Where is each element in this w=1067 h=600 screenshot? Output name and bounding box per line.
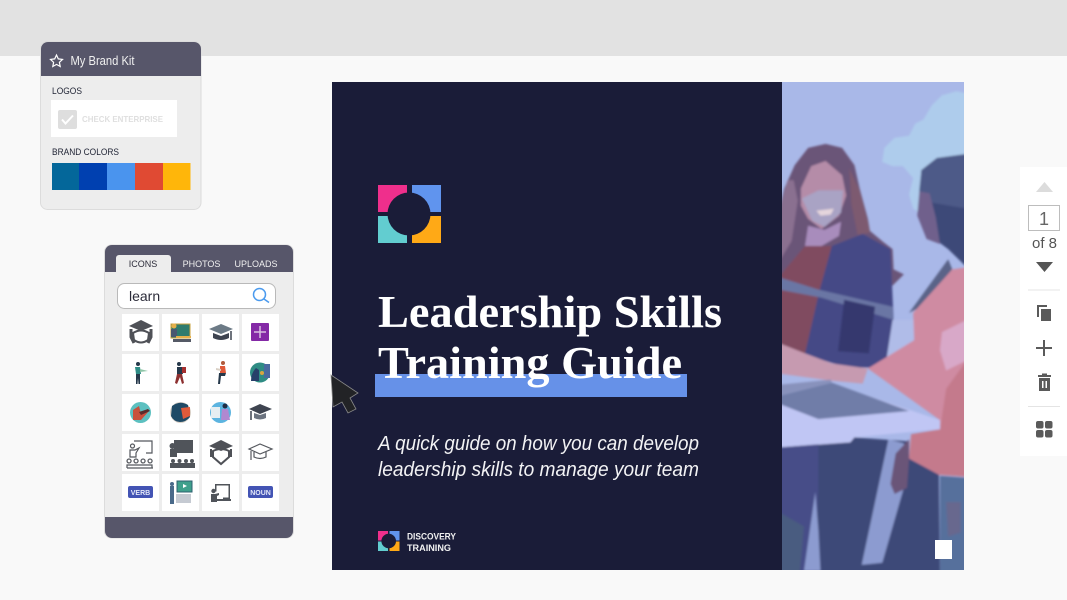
icon: grid view <box>1036 421 1052 438</box>
photo: left woman jacket <box>804 234 894 369</box>
search box <box>118 284 276 308</box>
brand kit header <box>41 42 201 76</box>
icon: graduate head large <box>209 440 233 464</box>
icon: previous page <box>1036 182 1053 192</box>
footer logo: DISCOVERY <box>407 532 457 542</box>
logo placeholder <box>51 100 177 137</box>
panel: slide photo <box>779 82 973 573</box>
page count: of 8 <box>1032 235 1057 252</box>
photo: jacket stripe <box>779 277 894 320</box>
panel: brand kit <box>40 42 201 210</box>
icon: purple plus <box>251 323 269 341</box>
panel tabs: ICONS <box>129 259 157 269</box>
footer logo: TRAINING <box>407 543 451 554</box>
icon: noun badge: NOUN <box>250 490 271 497</box>
panel footer <box>105 517 293 538</box>
icon: add <box>1036 340 1052 356</box>
icon: classroom solid <box>170 440 195 468</box>
icon: graduation cap <box>209 324 233 340</box>
photo: right woman collar <box>909 259 952 313</box>
icon: presenter with screen <box>170 481 192 504</box>
photo: left woman hair <box>782 142 904 286</box>
photo: window below jacket <box>886 318 912 358</box>
icon: cap outline <box>249 444 272 460</box>
icon: delete <box>1038 374 1051 391</box>
icon: round scene teal <box>250 362 270 382</box>
icon: graduate head <box>129 320 153 343</box>
icon: classroom outline <box>127 441 153 468</box>
subtitle: leadership skills to manage your team <box>378 459 699 481</box>
icon grid <box>122 314 279 511</box>
title: Leadership Skills <box>378 286 722 337</box>
panel tabs: PHOTOS <box>183 259 220 269</box>
icon: round scene dark <box>170 402 191 423</box>
icon: person pointing <box>135 362 148 384</box>
photo background <box>882 91 964 212</box>
brand color swatches <box>52 163 190 190</box>
icon: copy <box>1037 305 1051 321</box>
title: Training Guide <box>378 337 682 388</box>
icon: noun badge <box>248 486 273 498</box>
photo: left woman dress <box>782 245 832 354</box>
icon: mouse cursor <box>331 375 358 413</box>
brand kit header: My Brand Kit <box>70 54 135 68</box>
icon: round scene pink <box>130 402 151 423</box>
icon: verb badge <box>128 486 153 498</box>
icon: person seated <box>216 361 226 384</box>
panel: page toolbar <box>1020 167 1067 456</box>
icon: cap dark <box>249 404 272 420</box>
footer logo <box>378 531 457 554</box>
panel: icon search <box>104 245 294 538</box>
icon: round scene blue <box>210 402 231 423</box>
icon: student with backpack <box>175 362 186 384</box>
photo: right woman hair <box>918 176 964 266</box>
photo: lower bodies <box>814 436 942 570</box>
icon: verb badge: VERB <box>131 490 150 497</box>
photo: right woman face <box>917 191 940 244</box>
photo: tablet <box>779 383 909 419</box>
slide marker <box>935 540 952 559</box>
photo: table <box>782 403 941 448</box>
icon: next page <box>1036 262 1053 272</box>
icon: teacher at board <box>171 324 191 342</box>
title highlight <box>375 374 687 397</box>
panel tabs: UPLOADS <box>234 259 278 269</box>
brand colors label: BRAND COLORS <box>52 147 119 158</box>
panel: slide cover <box>332 82 782 570</box>
subtitle <box>377 433 699 481</box>
top bar <box>0 0 1067 56</box>
icon: main logo <box>378 185 441 243</box>
panel tabs <box>105 245 293 272</box>
search box: learn <box>129 288 160 304</box>
photo: left woman face <box>801 161 846 229</box>
photo: forearm <box>779 343 868 384</box>
title <box>378 286 722 388</box>
photo: right woman top <box>868 266 964 426</box>
page number: 1 <box>1039 209 1049 229</box>
logos label: LOGOS <box>52 86 82 97</box>
subtitle: A quick guide on how you can develop <box>377 433 699 455</box>
logo placeholder: CHECK ENTERPRISE <box>82 114 163 124</box>
icon: teacher at board outline <box>211 484 231 502</box>
page number <box>1028 206 1060 230</box>
